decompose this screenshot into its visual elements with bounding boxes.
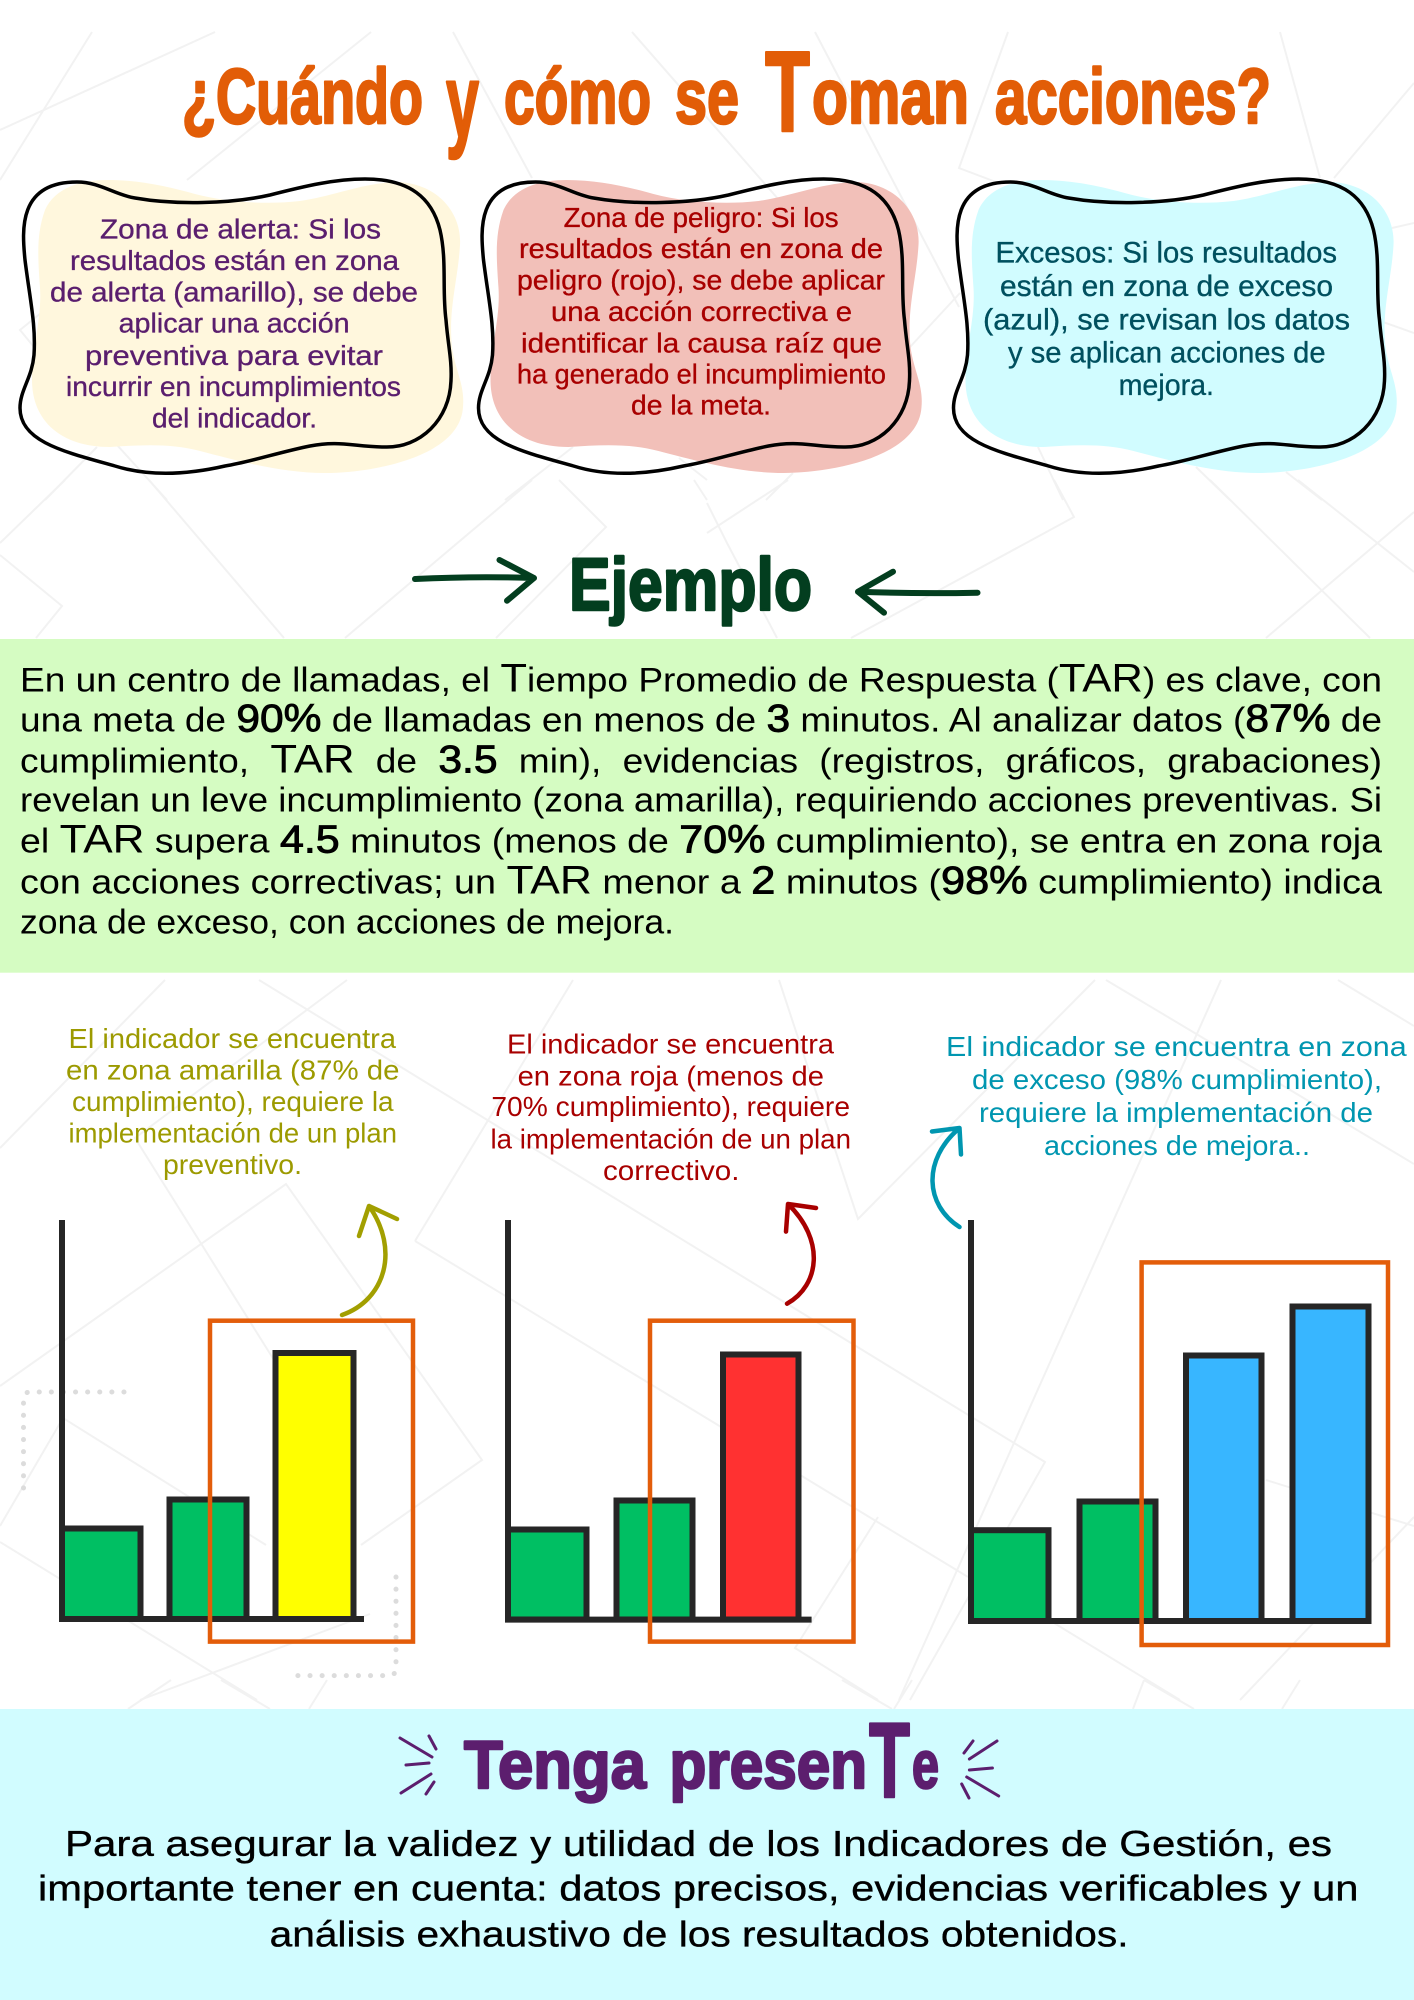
heading: tenga presente: e (912, 1727, 939, 1803)
text: zona de alerta: del indicador. (152, 403, 317, 434)
arrow: zona de exceso (932, 1128, 961, 1227)
callout: zona amarilla (66, 1023, 400, 1180)
text: zona de alerta: aplicar una acción (119, 308, 350, 339)
text: zona de peligro: peligro (rojo), se debe aplicar (517, 264, 885, 295)
panel: zona de alerta (20, 179, 463, 473)
title: oman (812, 52, 969, 140)
title: se (675, 52, 739, 140)
callout: zona roja: correctivo. (603, 1155, 740, 1186)
text: zona de peligro: de la meta. (631, 389, 771, 420)
text: ejemplo: una meta de 90% de llamadas en menos de 3 minutos. Al analizar datos ( 87% de (20, 698, 1382, 741)
title: ¿Cuándo (182, 52, 423, 140)
heading: tenga presente (464, 1700, 939, 1820)
text: zona de peligro: ha generado el incumplimiento (517, 358, 886, 389)
callout: zona de exceso: acciones de mejora.. (1044, 1130, 1310, 1161)
text: excesos: y se aplican acciones de (1008, 337, 1326, 370)
arrow: zona amarilla (342, 1206, 397, 1315)
text: zona de alerta (50, 214, 418, 434)
text: excesos: están en zona de exceso (1000, 270, 1333, 303)
callout: zona de exceso: requiere la implementación de (979, 1097, 1373, 1128)
callout: zona amarilla: cumplimiento), requiere la (72, 1086, 394, 1117)
text: ejemplo: con acciones correctivas; un TAR menor a 2 minutos ( 98% cumplimiento) indica (20, 858, 1382, 902)
icon: destello derecho (962, 1741, 999, 1798)
text: zona de peligro (517, 202, 886, 420)
callout: zona de exceso: El indicador se encuentra en zona (946, 1031, 1407, 1062)
text: ejemplo (20, 657, 1382, 941)
heading: tenga presente: Tenga (464, 1727, 647, 1803)
panel: excesos (954, 179, 1397, 473)
text: excesos (983, 236, 1350, 402)
heading: tenga presente: presen (670, 1727, 867, 1803)
text: ejemplo: zona de exceso, con acciones de mejora. (20, 903, 674, 941)
callout: zona amarilla: El indicador se encuentra (68, 1023, 396, 1054)
callout: zona de exceso: de exceso (98% cumplimiento), (972, 1064, 1382, 1095)
text: zona de alerta: preventiva para evitar (85, 340, 383, 371)
icon: destello izquierdo (400, 1736, 436, 1794)
text: excesos: mejora. (1119, 369, 1214, 402)
text: zona de alerta: Zona de alerta: Si los (100, 214, 381, 245)
bar chart: zona amarilla (62, 1220, 413, 1642)
text: zona de peligro: Zona de peligro: Si los (564, 202, 839, 233)
title: y (446, 43, 479, 160)
text: ejemplo: En un centro de llamadas, el Tiempo Promedio de Respuesta ( TAR) es clave, con (20, 657, 1382, 701)
text: ejemplo: el TAR supera 4.5 minutos (menos de 70% cumplimiento), se entra en zona roja (20, 818, 1382, 862)
text: ejemplo: revelan un leve incumplimiento (zona amarilla), requiriendo acciones preventivas. Si (20, 782, 1382, 820)
callout: zona roja: la implementación de un plan (490, 1124, 851, 1154)
text: excesos: (azul), se revisan los datos (983, 303, 1350, 336)
text: ejemplo: cumplimiento, TAR de 3.5 min), evidencias (registros, gráficos, grabaciones) (20, 738, 1382, 782)
callout: zona roja: en zona roja (menos de (518, 1061, 824, 1092)
heading: ejemplo: Ejemplo (569, 543, 812, 626)
heading: tenga presente: T (869, 1700, 910, 1820)
arrow: ejemplo derecha (858, 572, 978, 613)
title: T (765, 29, 810, 156)
text: excesos: Excesos: Si los resultados (996, 236, 1337, 269)
bar chart: zona roja (508, 1220, 854, 1642)
text: zona de peligro: resultados están en zona de (519, 233, 883, 264)
text: tenga presente: análisis exhaustivo de los resultados obtenidos. (270, 1914, 1129, 1955)
text: zona de peligro: una acción correctiva e (551, 296, 852, 327)
title: acciones? (995, 52, 1271, 140)
text: zona de alerta: resultados están en zona (70, 245, 399, 276)
arrow: ejemplo izquierda (415, 560, 534, 601)
callout: zona roja (490, 1028, 851, 1186)
text: tenga presente (38, 1823, 1358, 1955)
arrow: zona roja (786, 1204, 816, 1304)
title (182, 29, 1271, 160)
bar chart: zona de exceso (971, 1220, 1388, 1645)
text: tenga presente: Para asegurar la validez y utilidad de los Indicadores de Gestión, es (65, 1823, 1332, 1864)
callout: zona roja: 70% cumplimiento), requiere (491, 1091, 850, 1122)
text: zona de alerta: incurrir en incumplimientos (66, 371, 401, 402)
text: zona de alerta: de alerta (amarillo), se debe (50, 277, 418, 308)
callout: zona amarilla: en zona amarilla (87% de (66, 1055, 400, 1086)
callout: zona amarilla: implementación de un plan (68, 1118, 397, 1148)
title: cómo (504, 52, 651, 140)
panel: ejemplo (0, 639, 1414, 973)
text: tenga presente: importante tener en cuenta: datos precisos, evidencias verificables y un (38, 1868, 1358, 1909)
panel: tenga presente (0, 1700, 1414, 2000)
callout: zona roja: El indicador se encuentra (507, 1028, 834, 1060)
text: zona de peligro: identificar la causa raíz que (521, 327, 882, 358)
callout: zona de exceso (946, 1031, 1407, 1161)
panel: zona de peligro (478, 179, 922, 473)
callout: zona amarilla: preventivo. (163, 1149, 302, 1180)
